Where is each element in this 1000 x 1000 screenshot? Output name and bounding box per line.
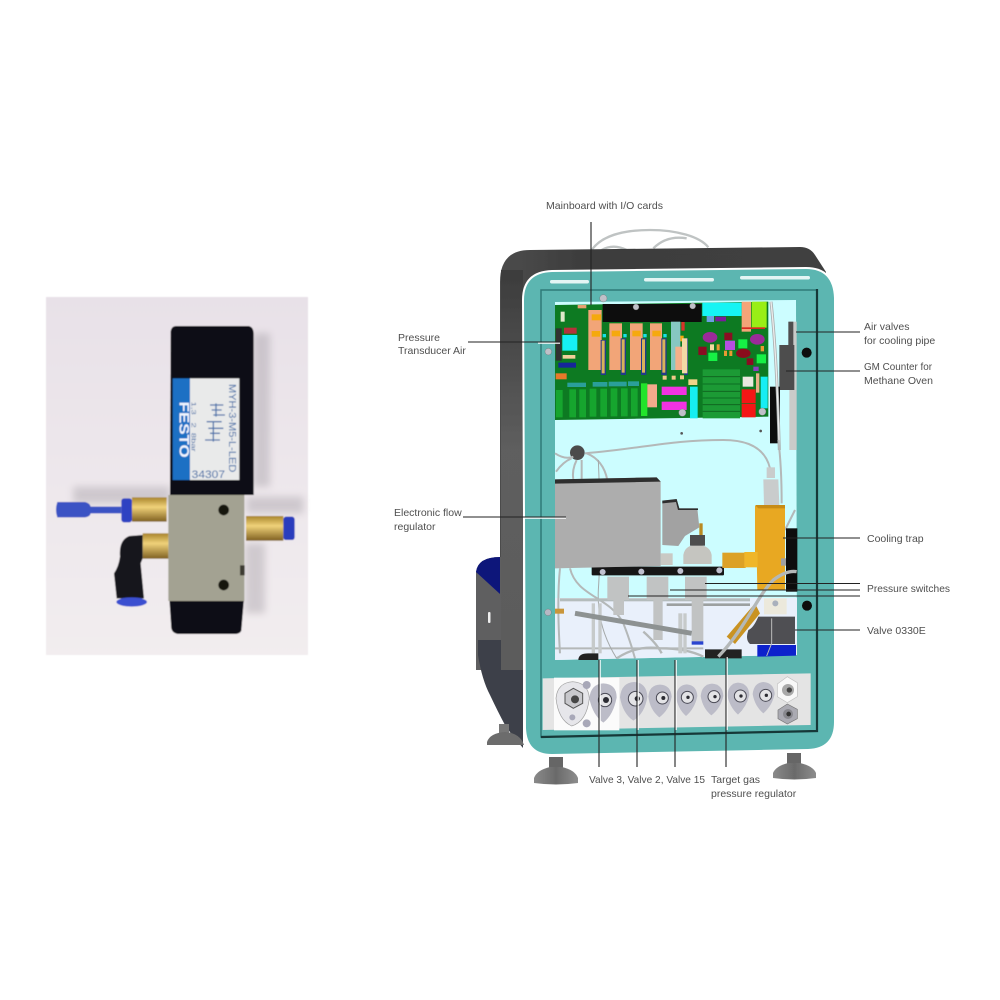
photo background	[46, 297, 308, 655]
lower window bay	[555, 598, 797, 660]
rear column	[501, 270, 523, 670]
main circuit board	[545, 295, 812, 450]
GM counter leader	[786, 370, 860, 372]
rear foot	[487, 724, 524, 745]
pressure switch fittings	[607, 577, 707, 645]
photo: Festo solenoid valve	[46, 297, 308, 655]
cooling trap leader	[783, 537, 860, 539]
upper switches	[661, 523, 712, 565]
air valves leader	[796, 331, 860, 333]
label: GM counter: GM Counter for	[864, 361, 932, 373]
trap screw	[781, 558, 788, 566]
label: pressure transducer: Transducer Air	[398, 345, 466, 357]
front right foot	[773, 753, 816, 780]
front left foot	[534, 757, 578, 784]
panel plate	[543, 673, 811, 730]
label: pressure transducer: Pressure	[398, 332, 440, 344]
teal terminal bars	[567, 381, 639, 387]
white left plate	[554, 678, 619, 730]
regulator leader highlight	[525, 517, 566, 519]
white bulkhead fitting	[777, 677, 797, 703]
small orange parts	[710, 327, 765, 356]
rear dark housing	[500, 247, 826, 620]
valve shadows	[73, 333, 303, 613]
green sockets	[556, 388, 638, 417]
brand text: FESTO	[176, 402, 192, 458]
grey tubing	[555, 440, 795, 658]
label: target gas pressure regulator: pressure regulator	[711, 788, 797, 800]
label: air valves: for cooling pipe	[864, 335, 935, 347]
tilted pipe	[575, 613, 692, 633]
label: GM counter: Methane Oven	[864, 375, 933, 387]
valve body	[56, 326, 295, 634]
board screws	[545, 295, 766, 416]
right blue collar	[283, 517, 295, 540]
vertical leader highlights	[600, 657, 727, 730]
electronic flow regulator leader	[463, 516, 566, 518]
model text: MYH-3-M5-L-LED	[226, 384, 237, 472]
label: cooling trap: Cooling trap	[867, 533, 924, 545]
top right modules	[702, 302, 767, 332]
valve 3 leader	[598, 660, 600, 767]
right brass fitting	[246, 516, 283, 541]
label: valve 0330E: Valve 0330E	[867, 625, 926, 637]
brass stub	[555, 609, 564, 614]
inner frame line	[541, 290, 817, 737]
right frame hole	[802, 601, 812, 611]
brass cooling trap	[722, 505, 785, 590]
black solenoid housing	[170, 326, 254, 495]
blue push-in collar	[121, 498, 132, 522]
extra card	[671, 322, 687, 373]
right side assembly	[770, 302, 812, 450]
grey bulkhead fitting	[778, 704, 797, 724]
label: target gas pressure regulator: Target gas	[711, 774, 760, 786]
lower brass fitting	[143, 533, 168, 559]
part number: 34307	[192, 469, 225, 481]
label: white panel	[190, 378, 239, 480]
valve 0330E body	[747, 617, 795, 644]
connector pins	[602, 339, 665, 373]
labels	[394, 200, 950, 800]
lower assembly	[545, 440, 812, 660]
electronic flow regulator box	[555, 477, 661, 568]
valve 2 leader	[636, 660, 638, 767]
trap top fitting	[763, 467, 779, 505]
side panel slot	[488, 612, 490, 623]
black cover	[603, 304, 702, 322]
I/O cards	[588, 310, 662, 370]
pressure transducer leader highlight	[538, 342, 560, 344]
tubes above cabinet	[592, 230, 708, 250]
port centres	[603, 694, 768, 703]
small capacitors	[663, 375, 684, 380]
teal front frame	[523, 268, 835, 755]
window	[555, 300, 797, 660]
top frame slots	[550, 276, 810, 284]
brass side valve	[727, 603, 760, 644]
side panel lower shade	[478, 640, 523, 748]
centre modules	[641, 379, 698, 418]
board	[555, 302, 768, 420]
label: valves 3, 2, 15: Valve 3, Valve 2, Valve 15	[589, 774, 705, 786]
label: air valves: Air valves	[864, 321, 910, 333]
leader lines	[463, 222, 860, 767]
pressure text: 1,3 2 8bar	[190, 402, 197, 453]
first large port	[556, 681, 591, 727]
trap lower bracket	[764, 598, 787, 614]
card chips	[592, 314, 684, 341]
black cooling block	[786, 528, 797, 592]
mounting holes	[218, 505, 245, 590]
side panel blue top	[476, 557, 500, 594]
window screws	[680, 430, 762, 435]
pressure transducer leader	[468, 341, 560, 343]
valve wire	[767, 618, 772, 656]
black lower housing	[169, 598, 244, 634]
label: pressure switches: Pressure switches	[867, 583, 950, 595]
back posts	[592, 603, 687, 653]
top-left brass fitting	[132, 497, 167, 522]
valve symbol	[205, 403, 225, 442]
connector panel	[543, 673, 811, 730]
blue elbow cap	[116, 597, 147, 607]
blue plug	[56, 502, 121, 517]
left frame screw	[545, 609, 551, 616]
cyan small parts	[603, 334, 667, 337]
thick curved tube over valve	[718, 571, 797, 657]
label: electronic flow regulator: Electronic flow	[394, 507, 462, 519]
long thin wire	[598, 460, 617, 658]
mainboard leader	[590, 222, 592, 305]
port nuts	[598, 689, 772, 707]
teardrop port row	[589, 682, 775, 723]
regulator connector	[662, 499, 699, 546]
relay block	[703, 369, 740, 418]
tube manifold knot	[570, 445, 585, 460]
valve 15 leader	[674, 660, 676, 767]
black elbow connector	[114, 535, 144, 598]
target gas regulator leader	[725, 657, 727, 767]
label: electronic flow regulator: regulator	[394, 521, 436, 533]
left side panel	[476, 557, 523, 670]
label: blue FESTO band	[173, 378, 191, 480]
left components	[556, 305, 586, 379]
back rail	[560, 598, 750, 606]
card connectors	[601, 338, 688, 375]
diagram: process module cabinet	[476, 230, 835, 785]
manifold screws	[600, 567, 722, 575]
valve blue coil	[757, 645, 796, 657]
purple and red components	[698, 332, 766, 371]
label: mainboard: Mainboard with I/O cards	[546, 200, 663, 212]
right board parts	[742, 373, 768, 417]
pressure switch leaders	[628, 584, 860, 596]
right dark frame edge	[541, 289, 817, 737]
valve 0330E leader	[795, 629, 860, 631]
black blocks at base	[578, 649, 742, 660]
black manifold bar	[592, 567, 724, 575]
grey aluminium block	[168, 495, 244, 601]
